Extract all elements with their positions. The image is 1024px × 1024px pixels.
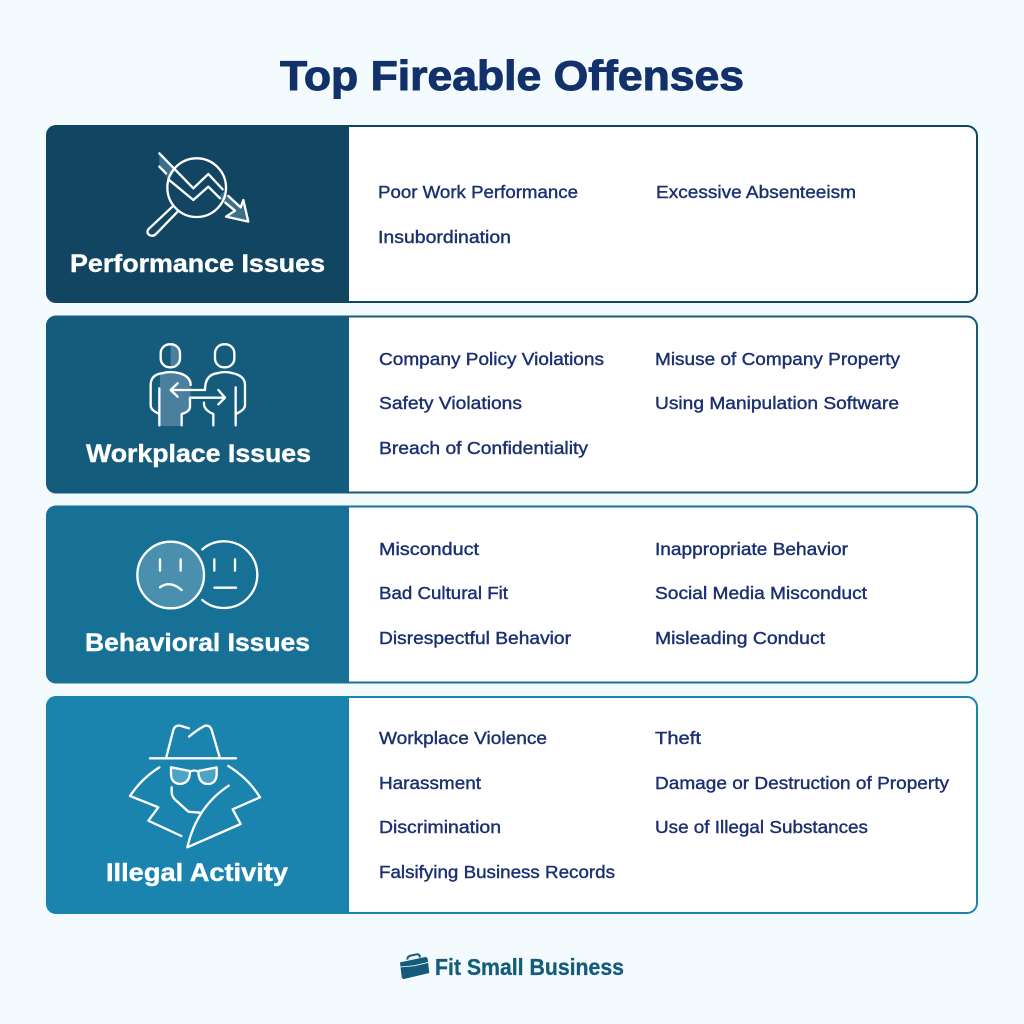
heading: workplace issues: Workplace Issues (86, 440, 311, 468)
heading: behavioral issues: Behavioral Issues (85, 629, 310, 657)
list: illegal activity: Theft (655, 728, 701, 748)
list: behavioral issues: Misleading Conduct (655, 628, 825, 648)
list: performance issues: Excessive Absenteeism (656, 182, 856, 202)
list: workplace issues: Misuse of Company Property (655, 349, 900, 369)
icon: briefcase (400, 954, 429, 979)
list: behavioral issues: Disrespectful Behavior (379, 628, 571, 648)
list: behavioral issues: Social Media Misconduct (655, 583, 867, 603)
list: workplace issues: Company Policy Violations (379, 349, 604, 369)
icon: two people exchanging (151, 344, 245, 426)
list: behavioral issues: Inappropriate Behavior (655, 539, 848, 559)
list: performance issues: Poor Work Performance (378, 182, 578, 202)
list: illegal activity: Damage or Destruction of Property (655, 773, 949, 793)
list: workplace issues: Using Manipulation Software (655, 393, 899, 413)
list: workplace issues (379, 349, 900, 458)
list: performance issues: Insubordination (378, 227, 511, 247)
list: illegal activity: Discrimination (379, 817, 501, 837)
list: illegal activity: Falsifying Business Records (379, 862, 615, 882)
list: behavioral issues: Bad Cultural Fit (379, 583, 508, 603)
logo: Fit Small Business: Fit Small Business (435, 954, 624, 980)
list: performance issues (378, 182, 856, 247)
list: workplace issues: Breach of Confidentiality (379, 438, 588, 458)
panel: performance issues (46, 125, 977, 303)
list: behavioral issues: Misconduct (379, 539, 479, 559)
icon: magnifier over falling chart (147, 153, 248, 236)
list: behavioral issues (379, 539, 867, 648)
list: illegal activity: Use of Illegal Substances (655, 817, 868, 837)
heading: illegal activity: Illegal Activity (106, 859, 288, 887)
list: illegal activity: Harassment (379, 773, 481, 793)
list: workplace issues: Safety Violations (379, 393, 522, 413)
panel: workplace issues (46, 316, 977, 494)
icon: two faces (137, 541, 257, 608)
list: illegal activity (379, 728, 949, 882)
panel: illegal activity (46, 696, 977, 914)
heading: performance issues: Performance Issues (70, 250, 325, 278)
panel: behavioral issues (46, 506, 977, 684)
list: illegal activity: Workplace Violence (379, 728, 547, 748)
title: Top Fireable Offenses (280, 52, 744, 99)
icon: spy with hat and glasses (130, 726, 260, 847)
